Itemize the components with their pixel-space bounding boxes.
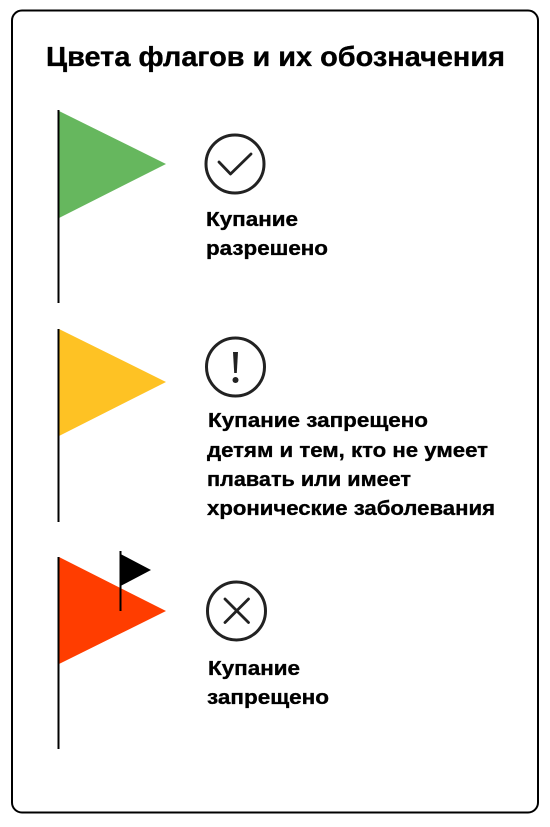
icon: small black flag [120, 551, 151, 611]
text: bathing restricted: плавать или имеет [207, 469, 411, 491]
icon: exclamation mark [206, 338, 264, 396]
icon: red flag [58, 557, 166, 749]
text: bathing allowed: разрешено [206, 238, 328, 260]
red flag row [58, 551, 329, 749]
text: bathing restricted: хронические заболевания [207, 498, 495, 520]
text: bathing allowed: Купание [206, 209, 298, 231]
text: bathing prohibited [207, 658, 329, 709]
yellow flag row [58, 329, 495, 522]
text: bathing prohibited: Купание [208, 658, 300, 680]
title: Цвета флагов и их обозначения [46, 41, 505, 72]
text: bathing allowed [206, 209, 328, 260]
text: bathing restricted [207, 410, 495, 520]
icon: check mark [206, 135, 264, 193]
text: bathing prohibited: запрещено [207, 687, 329, 709]
green flag row [58, 110, 328, 303]
icon: cross mark [208, 582, 266, 640]
text: bathing restricted: Купание запрещено [208, 410, 428, 432]
icon: yellow flag [58, 329, 166, 522]
text: bathing restricted: детям и тем, кто не умеет [207, 440, 488, 462]
icon: green flag [58, 110, 166, 303]
